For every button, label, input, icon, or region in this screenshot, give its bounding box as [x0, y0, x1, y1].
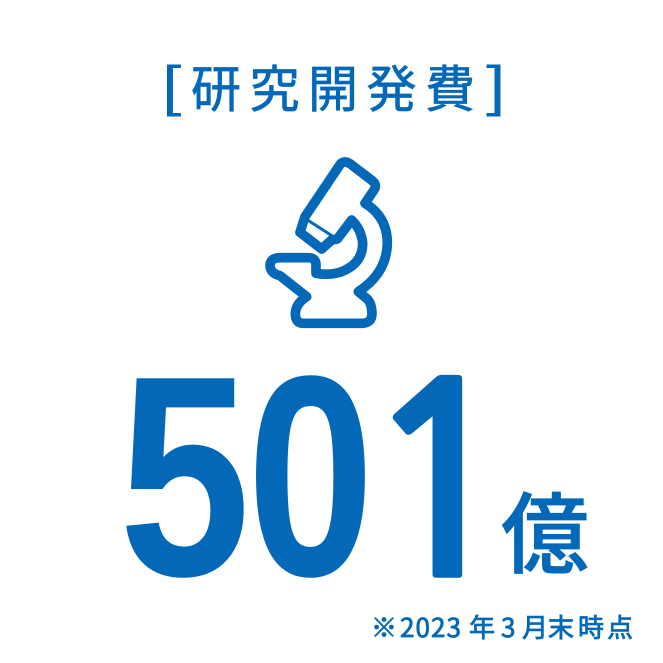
left bracket: [ [162, 56, 182, 117]
right bracket: ] [486, 56, 505, 117]
heading text: 研究開発費 [191, 50, 484, 122]
icon: microscope [270, 162, 387, 323]
heading: R&D expenses in brackets [162, 50, 505, 122]
digit 0: 0 [247, 317, 374, 636]
digit 1: 1 [357, 353, 525, 617]
figure: 501 [119, 316, 525, 636]
footnote: as of March 2023: ※2023年3月末時点 [371, 608, 633, 645]
unit: oku: 億 [501, 465, 589, 592]
digit 5: 5 [119, 316, 250, 636]
